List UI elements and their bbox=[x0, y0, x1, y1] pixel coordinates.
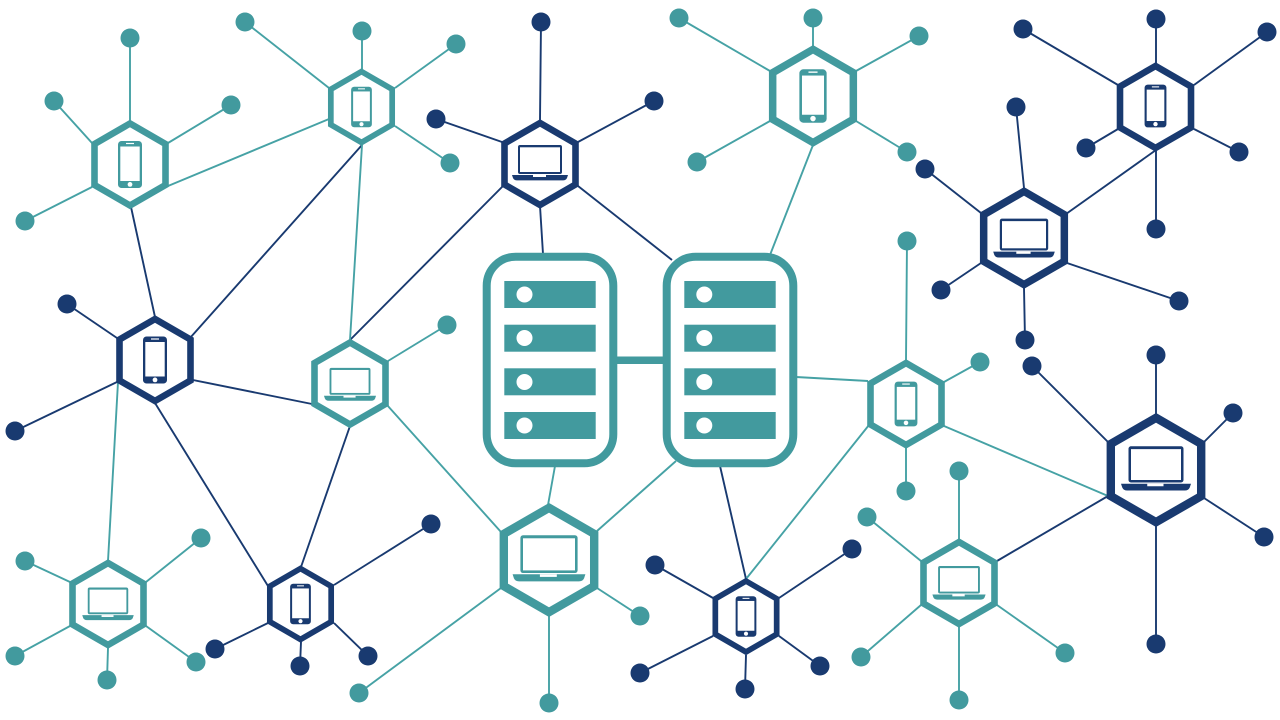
node: teal laptop, bottom left bbox=[6, 528, 210, 690]
teal connection lines between nodes bbox=[108, 119, 1108, 579]
node: teal phone, top left bbox=[236, 12, 466, 172]
server link bar bbox=[616, 356, 664, 364]
node: navy laptop, upper right bbox=[916, 98, 1188, 350]
node: navy phone, bottom left bbox=[206, 514, 440, 676]
server pair bbox=[487, 257, 793, 463]
navy connection lines between nodes bbox=[131, 145, 1156, 586]
node: navy phone, top right bbox=[1014, 10, 1276, 238]
left server bbox=[487, 257, 613, 463]
node: teal laptop, bottom right bbox=[852, 462, 1074, 710]
node: navy laptop, top centre bbox=[426, 12, 664, 205]
node: teal phone, middle right bbox=[870, 232, 990, 500]
node: navy phone, bottom centre bbox=[630, 540, 862, 698]
node: navy laptop, lower right bbox=[1022, 346, 1274, 654]
right server bbox=[667, 257, 793, 463]
node: navy phone, middle left bbox=[6, 294, 190, 440]
node: teal phone, upper left bbox=[16, 28, 240, 230]
node: teal phone, top right of centre bbox=[670, 8, 928, 172]
node: teal laptop, bottom centre bbox=[350, 508, 650, 712]
node: teal laptop, middle left bbox=[314, 316, 456, 424]
